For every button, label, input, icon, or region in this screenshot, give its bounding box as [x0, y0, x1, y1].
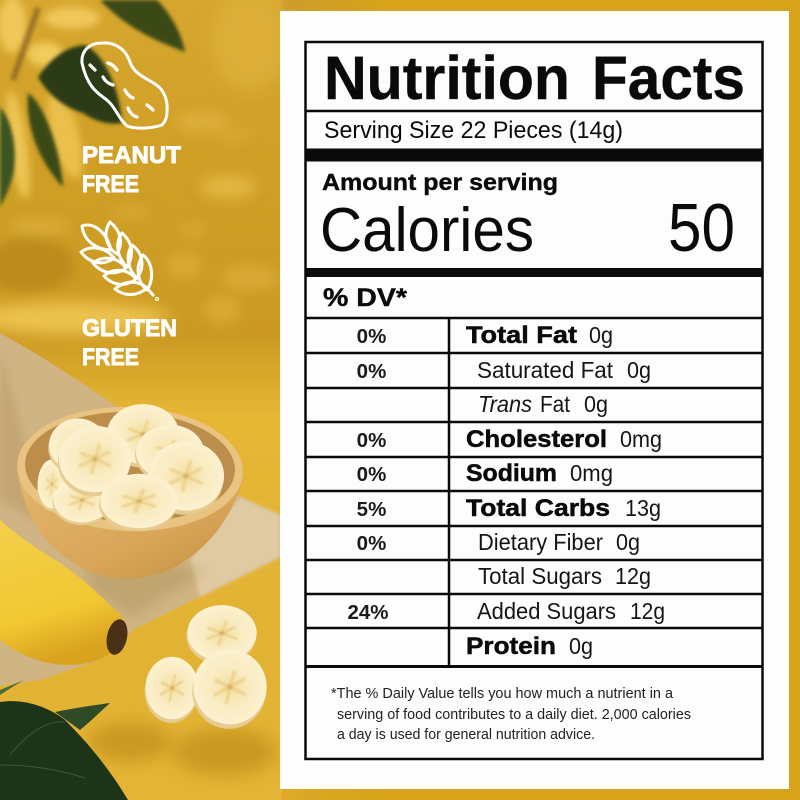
row: protein: 0g: [569, 633, 593, 659]
row: sodium: [357, 460, 613, 487]
row: added sugars: Added Sugars: [477, 598, 616, 624]
label: peanut free: FREE: [82, 171, 139, 198]
heading: nutrition facts: [324, 44, 745, 112]
table frame and rules: [305, 42, 762, 759]
row: sodium: 0%: [357, 463, 386, 486]
row: saturated fat: 0%: [357, 360, 386, 383]
row: total carbs: [357, 495, 661, 522]
row: cholesterol: 0mg: [620, 426, 662, 452]
row: dietary fiber: 0g: [616, 529, 640, 555]
row: total carbs: 13g: [625, 495, 661, 521]
row: added sugars: [347, 598, 665, 624]
label: peanut free: [82, 142, 181, 198]
bottom leaves: [0, 680, 128, 800]
loose banana slices: [145, 605, 267, 729]
row: cholesterol: [357, 426, 662, 453]
row: trans fat: [478, 391, 608, 417]
ground shadow: [88, 722, 277, 776]
row: trans fat: Trans: [478, 391, 532, 417]
footnote: *The % Daily Value tells you how much a nutrient in a: [331, 685, 674, 702]
footnote: a day is used for general nutrition advice.: [337, 726, 595, 743]
heading: nutrition facts: Facts: [592, 44, 745, 112]
panel: nutrition label card: [280, 11, 789, 789]
row: dietary fiber: Dietary Fiber: [478, 529, 603, 555]
blurred leaf shadows and sunlight: [0, 0, 290, 334]
percent daily value header: % DV*: [323, 284, 407, 312]
row: total fat: 0g: [589, 322, 613, 348]
row: sodium: Sodium: [466, 460, 557, 487]
label: gluten free: [82, 315, 177, 371]
row: total fat: Total Fat: [466, 322, 577, 349]
amount per serving: Amount per serving: [322, 169, 558, 195]
icon: peanut: [82, 43, 167, 128]
label: gluten free: FREE: [82, 344, 139, 371]
slices in bowl: [37, 404, 224, 531]
bowl of banana slices: [15, 403, 245, 579]
footnote: [331, 685, 691, 743]
row: saturated fat: Saturated Fat: [477, 357, 614, 383]
top branch and leaves: [0, 0, 185, 207]
serving size: Serving Size 22 Pieces (14g): [324, 117, 623, 144]
row: added sugars: 12g: [630, 598, 665, 624]
row: sodium: 0mg: [570, 460, 613, 486]
row: protein: [466, 633, 593, 660]
row: total sugars: 12g: [615, 563, 651, 589]
row: cholesterol: Cholesterol: [466, 426, 607, 453]
row: protein: Protein: [466, 633, 556, 660]
row: saturated fat: [357, 357, 651, 383]
row: dietary fiber: 0%: [357, 532, 386, 555]
row: total fat: [357, 322, 613, 349]
calories value: 50: [668, 190, 735, 266]
row: trans fat: 0g: [584, 391, 608, 417]
row: cholesterol: 0%: [357, 429, 386, 452]
row: trans fat: Fat: [540, 391, 571, 417]
row: dietary fiber: [357, 529, 640, 555]
banana: [0, 520, 131, 665]
row: total carbs: 5%: [357, 498, 386, 521]
label: gluten free: GLUTEN: [82, 315, 177, 342]
row: added sugars: 24%: [347, 601, 389, 624]
row: saturated fat: 0g: [627, 357, 651, 383]
calories label: Calories: [320, 196, 534, 265]
cloth: [0, 333, 280, 686]
bowl body: [18, 472, 243, 579]
heading: nutrition facts: Nutrition: [324, 44, 570, 112]
footnote: serving of food contributes to a daily diet. 2,000 calories: [337, 706, 691, 723]
row: total fat: 0%: [357, 325, 386, 348]
icon: wheat: [81, 222, 158, 300]
row: total sugars: Total Sugars: [478, 563, 602, 589]
row: total carbs: Total Carbs: [466, 495, 610, 522]
label: peanut free: PEANUT: [82, 142, 181, 169]
bowl rim: [15, 403, 245, 535]
